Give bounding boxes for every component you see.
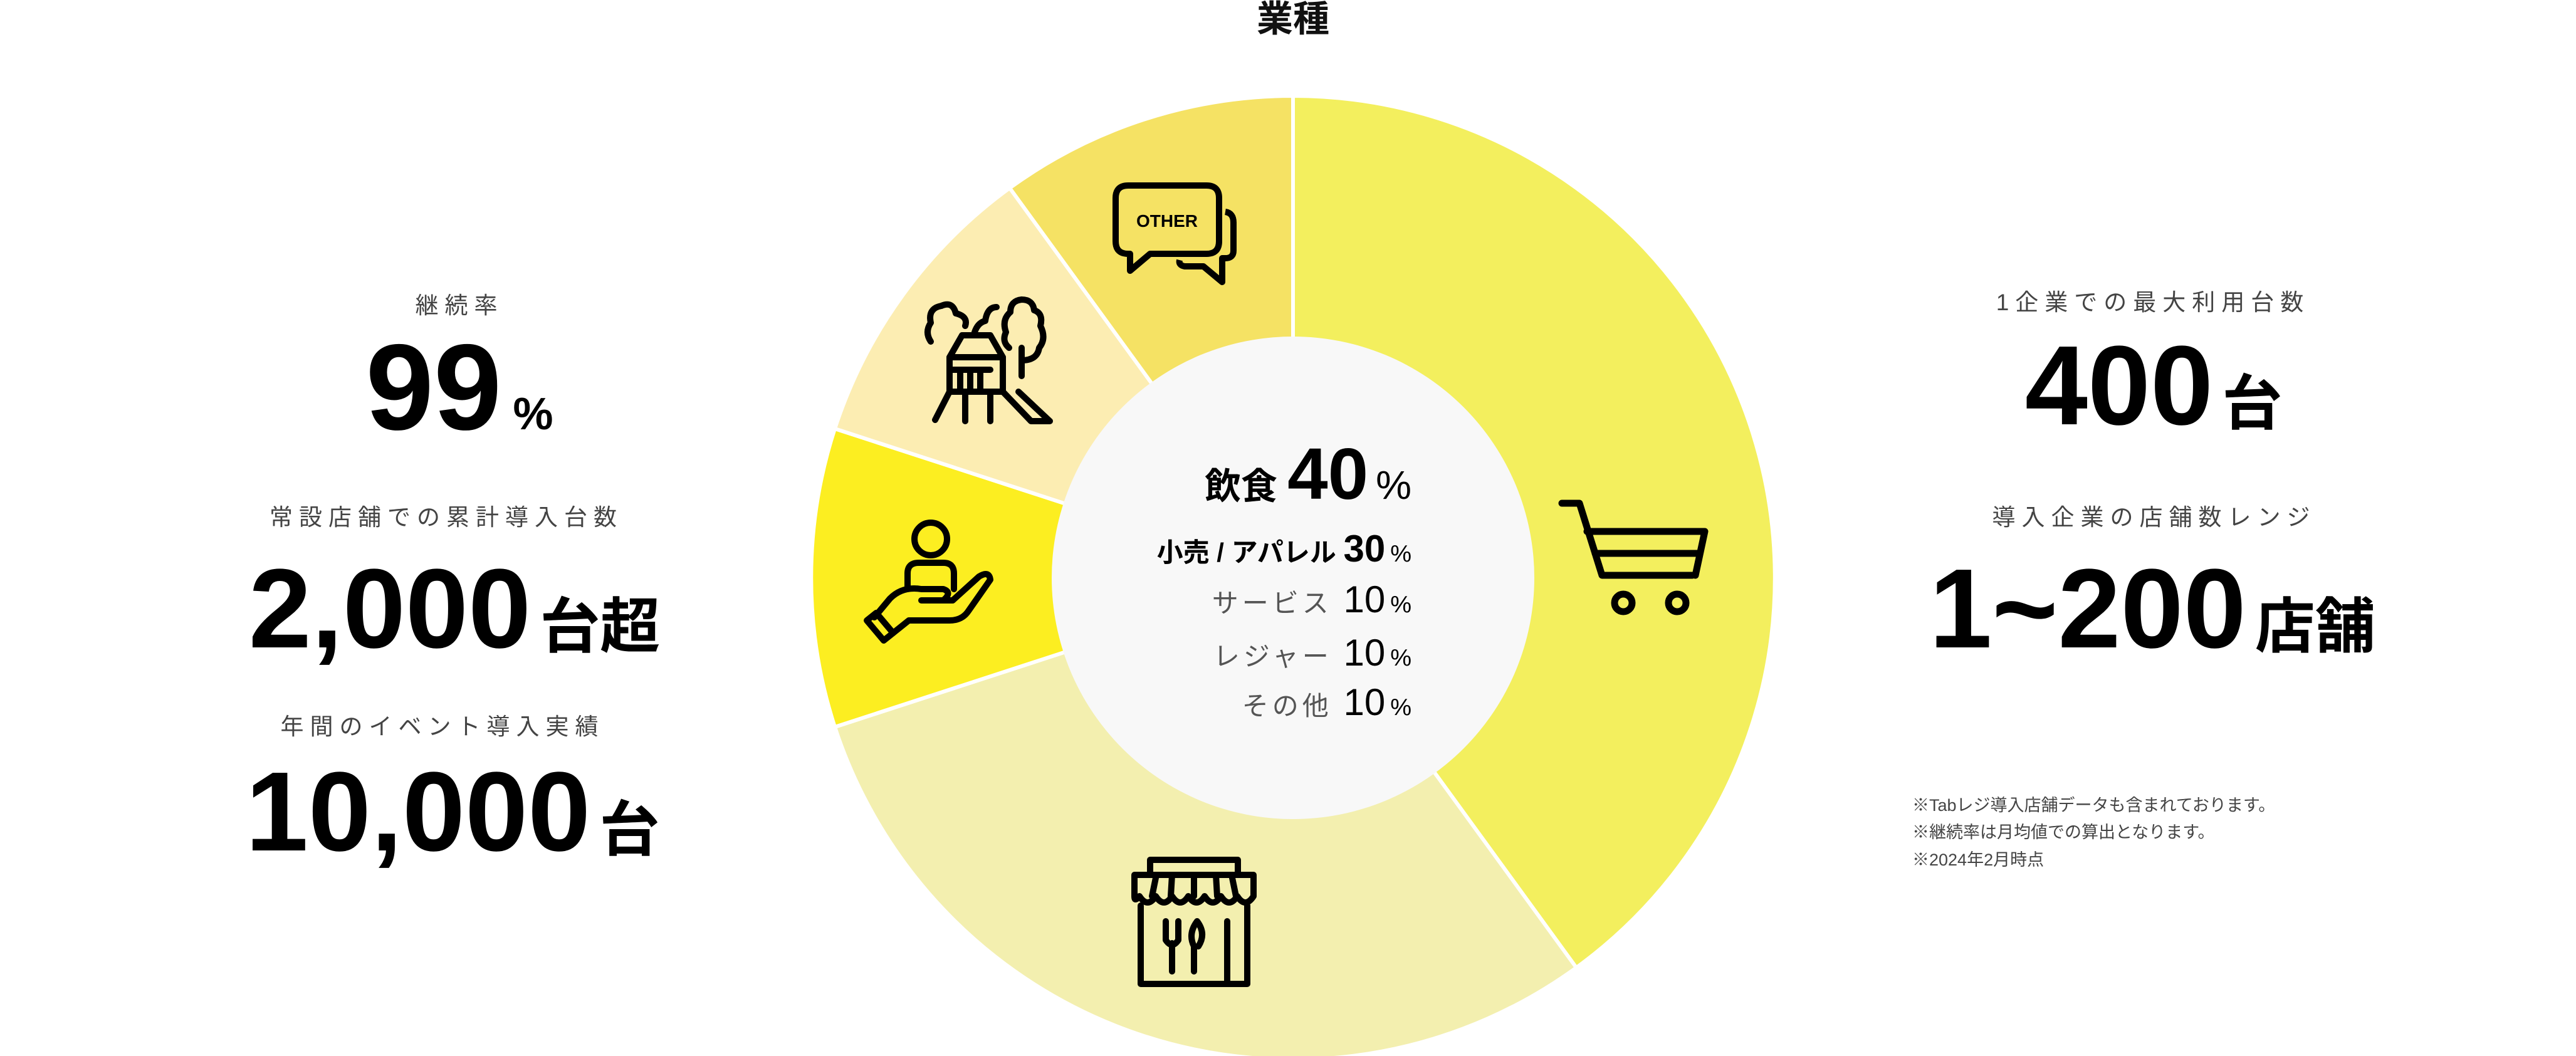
row: service 10%: サービス 10% [1212, 578, 1411, 620]
icon: hand holding person (service) [867, 523, 990, 640]
stat: retention value: 99% [366, 319, 553, 456]
left stats [246, 293, 660, 875]
segment: other 10% [1010, 96, 1293, 578]
icon: playground (leisure) [928, 300, 1050, 421]
row: retail 30%: 小売 / アパレル 30% [1157, 528, 1411, 570]
footnotes: ※継続率は月均値での算出となります。 [1912, 823, 2215, 842]
footnotes [1912, 796, 2275, 869]
icon: restaurant storefront [1134, 860, 1254, 984]
segment: retail 30% [835, 578, 1576, 1056]
donut chart [811, 96, 1775, 1056]
row: leisure 10%: レジャー 10% [1213, 632, 1411, 674]
segment: leisure 10% [835, 188, 1293, 578]
row: food 40%: 飲食 40% [1205, 433, 1411, 515]
icon: speech bubbles OTHER [1116, 186, 1233, 282]
stat: max units label: 1企業での最大利用台数 [1996, 290, 2310, 315]
stat: event value: 10,000台 [246, 749, 659, 875]
icon: shopping cart [1562, 503, 1705, 612]
stat: cumulative value: 2,000台超 [249, 546, 660, 672]
segment: service 10% [811, 429, 1293, 727]
row: other 10%: その他 10% [1242, 681, 1411, 723]
segment: food 40% [1293, 96, 1775, 968]
stat: retention label: 継続率 [415, 293, 504, 318]
stat: store range label: 導入企業の店舗数レンジ [1992, 504, 2317, 530]
footnotes: ※2024年2月時点 [1912, 850, 2044, 869]
stat: event label: 年間のイベント導入実績 [281, 714, 604, 740]
center breakdown text [1157, 433, 1411, 723]
icon: speech bubbles OTHER: OTHER [1136, 211, 1198, 231]
stat: store range value: 1~200店舗 [1929, 546, 2375, 672]
stat: cumulative label: 常設店舗での累計導入台数 [270, 504, 623, 530]
center circle [1052, 337, 1534, 819]
footnotes: ※Tabレジ導入店舗データも含まれております。 [1912, 796, 2275, 815]
right stats [1929, 290, 2375, 672]
stat: max units value: 400台 [2025, 323, 2282, 449]
